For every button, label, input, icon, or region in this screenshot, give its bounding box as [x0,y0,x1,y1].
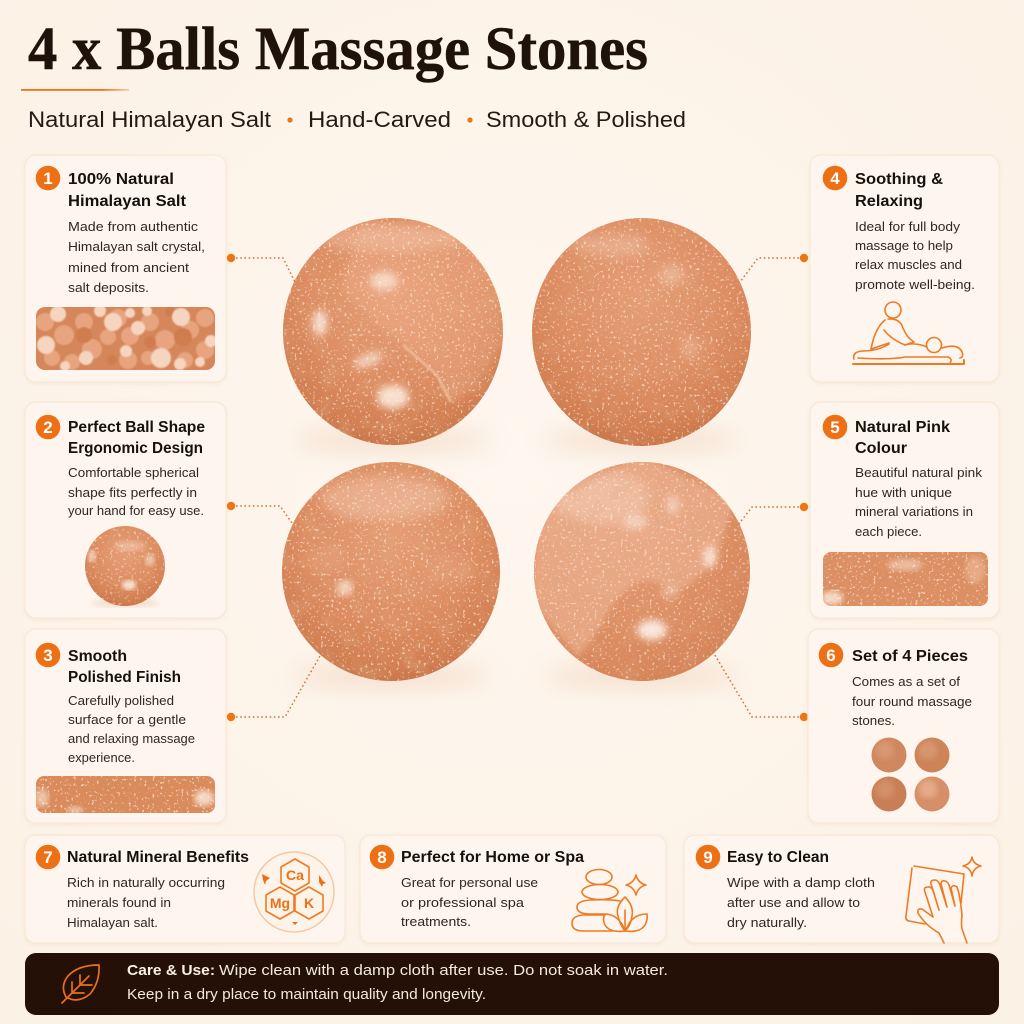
icon: cloth and hand [906,857,981,943]
panel 5: pink colour: 5 [830,418,840,437]
panel 5: pink colour: each piece. [855,524,922,539]
image: salt crystals [36,305,217,371]
panel 1: natural salt: 1 [43,169,53,188]
panel 9: easy to clean: Easy to Clean [727,849,829,866]
panel 8: home or spa: 8 [377,848,387,867]
panel 5: pink colour: hue with unique [855,485,952,500]
ball shadows [291,428,741,688]
panel 1: natural salt: salt deposits. [68,280,149,295]
panel 4: soothing: Relaxing [855,193,923,210]
panel 7: minerals: 7 [43,848,53,867]
panel 2: ball shape: Ergonomic Design [68,440,203,457]
icon: stacked stones [572,870,647,931]
massage ball bottom right [530,455,750,681]
panel 9: easy to clean: after use and allow to [727,895,860,910]
panel 5: pink colour: Natural Pink [855,419,950,436]
panel 2: ball shape: 2 [43,418,53,437]
panel 4: soothing: relax muscles and [855,257,962,272]
panel 5: pink colour: mineral variations in [855,504,973,519]
panel 3: polished finish: surface for a gentle [68,712,186,727]
panel 3: polished finish: Smooth [68,648,127,665]
panel 2: ball shape: your hand for easy use. [68,503,204,518]
panel 7: minerals: Rich in naturally occurring [67,875,225,890]
panel 1: natural salt: mined from ancient [68,260,189,275]
panel 3: polished finish: 3 [43,646,53,665]
panel 4: soothing: massage to help [855,238,953,253]
connector 4 [740,254,808,282]
image: pink texture [821,552,988,606]
title underline [21,89,129,91]
panel 4: soothing [810,155,999,382]
panel 6: set of four: Comes as a set of [852,674,960,689]
massage ball top right [532,218,752,446]
subtitle: Smooth & Polished [486,107,686,132]
care and use bar [25,953,999,1015]
panel 3: polished finish: Carefully polished [68,693,174,708]
care and use bar: Care & Use: [127,962,215,979]
panel 4: soothing: 4 [830,169,840,188]
panel 5: pink colour: Beautiful natural pink [855,465,982,480]
panel 1: natural salt: Himalayan salt crystal, [68,239,205,254]
panel 8: home or spa [360,835,666,943]
panel 1: natural salt [25,155,226,382]
panel 6: set of four: 6 [826,646,836,665]
panel 7: minerals: Himalayan salt. [67,915,158,930]
massage ball top left [283,218,503,445]
subtitle: Hand-Carved [308,107,451,132]
panel 5: pink colour [810,402,999,618]
panel 4: soothing: Ideal for full body [855,219,960,234]
panel 2: ball shape: Perfect Ball Shape [68,419,205,436]
subtitle [28,107,686,132]
care and use bar: Keep in a dry place to maintain quality and longevity. [127,986,486,1003]
panel 2: ball shape: shape fits perfectly in [68,485,197,500]
panel 6: set of four: Set of 4 Pieces [852,648,968,665]
panel 6: set of four: stones. [852,713,895,728]
panel 1: natural salt: Made from authentic [68,219,198,234]
panel 4: soothing: promote well-being. [855,277,975,292]
panel 3: polished finish: experience. [68,750,135,765]
icon: mineral hexagons: K [304,895,314,911]
panel 7: minerals: minerals found in [67,895,171,910]
icon: leaf [62,965,99,1003]
panel 8: home or spa: Perfect for Home or Spa [401,849,584,866]
panel 9: easy to clean [684,835,999,943]
icon: mineral hexagons: Mg [270,895,290,911]
panel 1: natural salt: 100% Natural [68,171,174,188]
panel 6: set of four: four round massage [852,694,972,709]
connector 2 [227,502,292,523]
connector 1 [227,254,295,282]
icon: mineral hexagons [254,852,334,932]
massage ball bottom left [282,462,500,681]
image: single ball [85,526,165,607]
panel 3: polished finish: Polished Finish [68,669,181,686]
panel 3: polished finish [25,629,226,823]
icon: mineral hexagons: Ca [286,867,304,883]
image: polished texture [35,776,215,814]
panel 8: home or spa: or professional spa [401,895,525,910]
panel 8: home or spa: treatments. [401,914,471,929]
panel 7: minerals [25,835,345,943]
panel 1: natural salt: Himalayan Salt [68,193,187,210]
panel 2: ball shape [25,402,226,618]
panel 2: ball shape: Comfortable spherical [68,465,199,480]
title: 4 x Balls Massage Stones [28,16,648,83]
panel 9: easy to clean: Wipe with a damp cloth [727,875,875,890]
connector 5 [738,503,808,525]
panel 9: easy to clean: dry naturally. [727,915,807,930]
panel 5: pink colour: Colour [855,440,907,457]
panel 4: soothing: Soothing & [855,171,943,188]
icon: massage [853,302,964,364]
panel 3: polished finish: and relaxing massage [68,731,195,746]
panel 9: easy to clean: 9 [703,848,713,867]
panel 8: home or spa: Great for personal use [401,875,538,890]
connector 6 [713,652,808,721]
connector 3 [227,656,320,721]
care and use bar: Wipe clean with a damp cloth after use. Do not soak in water. [219,962,668,979]
subtitle: Natural Himalayan Salt [28,107,271,132]
panel 7: minerals: Natural Mineral Benefits [67,849,249,866]
image: four balls [872,738,950,812]
panel 6: set of four [808,629,999,823]
